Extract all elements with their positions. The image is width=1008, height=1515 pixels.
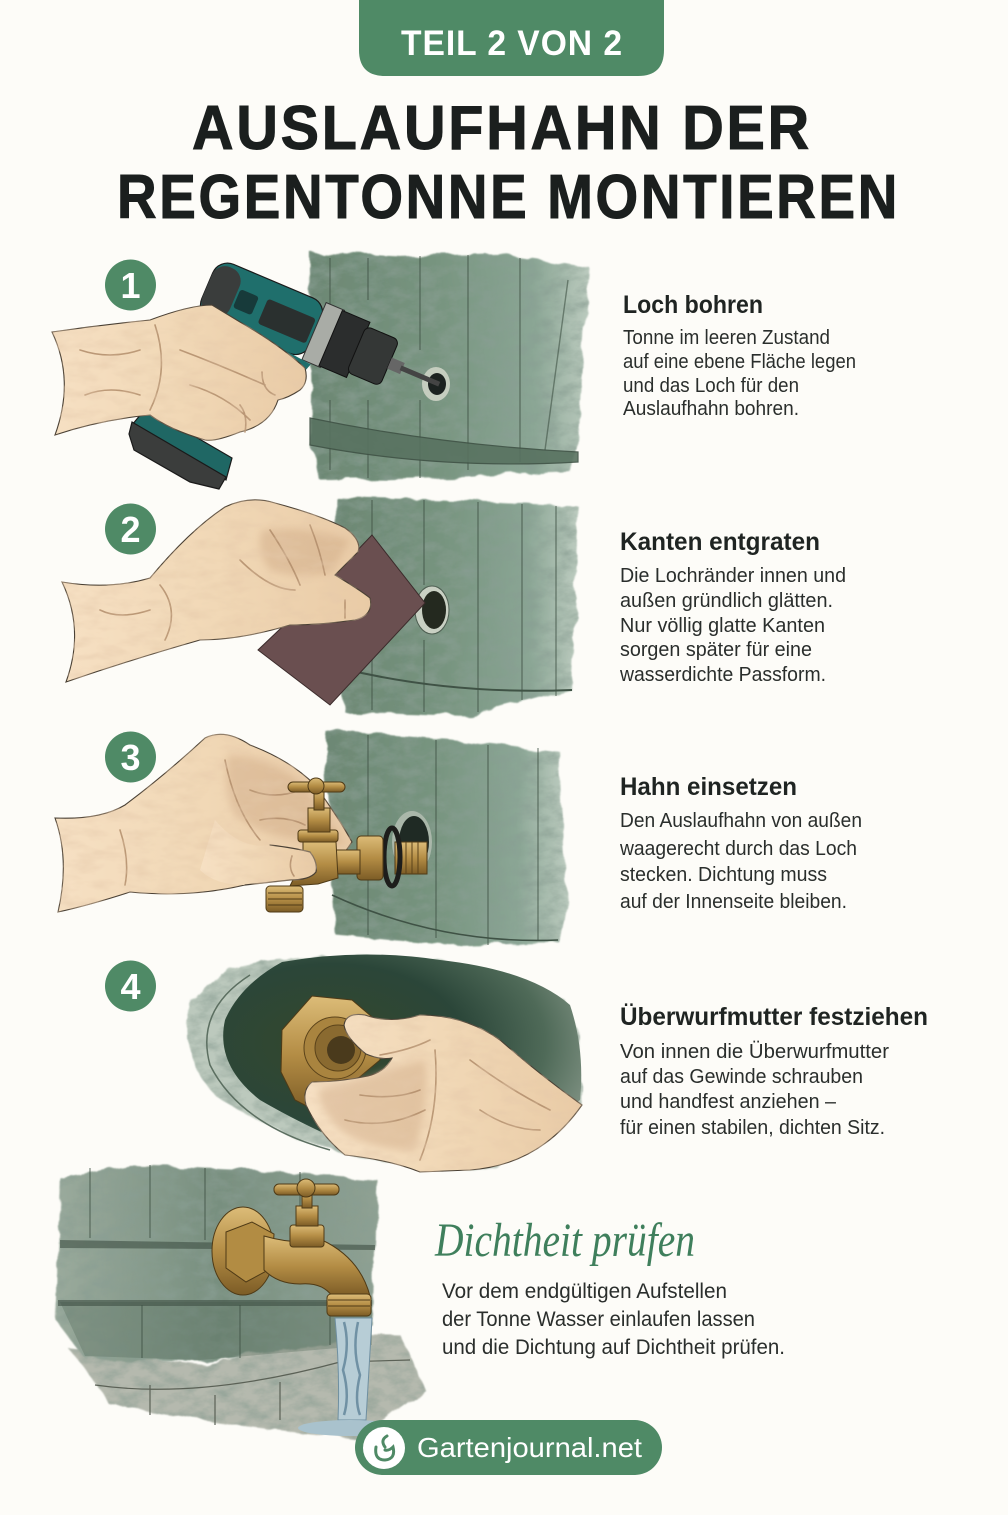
step 2 number: 2 — [120, 509, 141, 550]
thumb over tap — [200, 820, 316, 885]
step 3 illustration: inserting the tap — [55, 730, 566, 945]
brand pill: Gartenjournal.net — [417, 1432, 642, 1463]
step 3 text — [619, 773, 862, 913]
water stream — [298, 1318, 402, 1436]
step 4 text: und handfest anziehen – — [620, 1091, 837, 1113]
paving stones — [70, 1335, 425, 1440]
part badge: TEIL 2 VON 2 — [401, 24, 623, 63]
step 4 text: Überwurfmutter festziehen — [620, 1002, 928, 1031]
brand pill — [355, 1420, 662, 1475]
title: REGENTONNE MONTIEREN — [117, 163, 900, 232]
barrel with hole — [324, 730, 566, 945]
step 1 text: und das Loch für den — [623, 375, 799, 397]
step 3 text: waagerecht durch das Loch — [619, 838, 857, 860]
step 3 number — [105, 732, 156, 782]
step 1 number — [105, 260, 156, 310]
step 3 text: auf der Innenseite bleiben. — [620, 891, 847, 913]
sanding pad — [258, 535, 425, 705]
cordless drill — [190, 257, 451, 425]
step 4 number — [105, 960, 156, 1012]
barrel with hole — [335, 497, 578, 716]
title: AUSLAUFHAHN DER — [192, 94, 812, 163]
step 2 text: außen gründlich glätten. — [620, 590, 833, 612]
battery pack — [129, 408, 232, 489]
step 2 text: Kanten entgraten — [620, 528, 820, 556]
step 3 text: Hahn einsetzen — [620, 773, 797, 801]
barrel opening seen from inside — [186, 954, 582, 1170]
brass lock nut — [281, 996, 380, 1113]
step 4 text: Von innen die Überwurfmutter — [620, 1041, 889, 1063]
step 4 number: 4 — [120, 966, 141, 1007]
barrel side — [56, 1165, 378, 1362]
step 3 text: stecken. Dichtung muss — [620, 864, 827, 886]
step 1 number: 1 — [120, 265, 141, 306]
step 4 text: für einen stabilen, dichten Sitz. — [620, 1117, 885, 1139]
step 2 number — [105, 504, 156, 554]
leak test text: Vor dem endgültigen Aufstellen — [442, 1280, 727, 1303]
brass tap with flange — [212, 1179, 371, 1316]
leak test text: der Tonne Wasser einlaufen lassen — [442, 1308, 755, 1331]
step 1 text: auf eine ebene Fläche legen — [623, 351, 856, 373]
hand holding sanding pad — [62, 500, 371, 682]
step 2 text: wasserdichte Passform. — [619, 664, 826, 686]
part badge — [359, 0, 664, 76]
hand behind tap — [55, 734, 352, 912]
step 1 illustration: drilling the hole — [52, 252, 590, 489]
step 2 illustration: deburring — [62, 497, 578, 716]
step 2 text: Nur völlig glatte Kanten — [620, 615, 825, 637]
leak test text: und die Dichtung auf Dichtheit prüfen. — [442, 1336, 785, 1359]
hand tightening nut — [305, 1014, 582, 1172]
step 1 text: Tonne im leeren Zustand — [623, 327, 830, 349]
step 4 text — [620, 1002, 928, 1139]
step 1 text: Auslaufhahn bohren. — [623, 398, 799, 420]
step 4 illustration: tightening the nut inside — [186, 954, 582, 1172]
step 1 text — [623, 291, 856, 420]
step 2 text — [619, 528, 846, 686]
hand gripping the drill — [52, 305, 306, 440]
leak test heading: Dichtheit prüfen — [434, 1214, 695, 1267]
step 3 number: 3 — [120, 737, 141, 778]
icon: brand logo — [363, 1427, 405, 1469]
title — [117, 94, 900, 232]
barrel with drilled hole — [310, 252, 590, 480]
brass tap — [266, 778, 427, 912]
step 3 text: Den Auslaufhahn von außen — [620, 810, 862, 832]
step 1 text: Loch bohren — [623, 291, 763, 319]
step 2 text: sorgen später für eine — [620, 639, 812, 661]
final illustration: leak test with running tap — [56, 1165, 425, 1440]
step 4 text: auf das Gewinde schrauben — [620, 1066, 863, 1088]
step 2 text: Die Lochränder innen und — [620, 565, 846, 587]
leak test text — [442, 1280, 785, 1359]
